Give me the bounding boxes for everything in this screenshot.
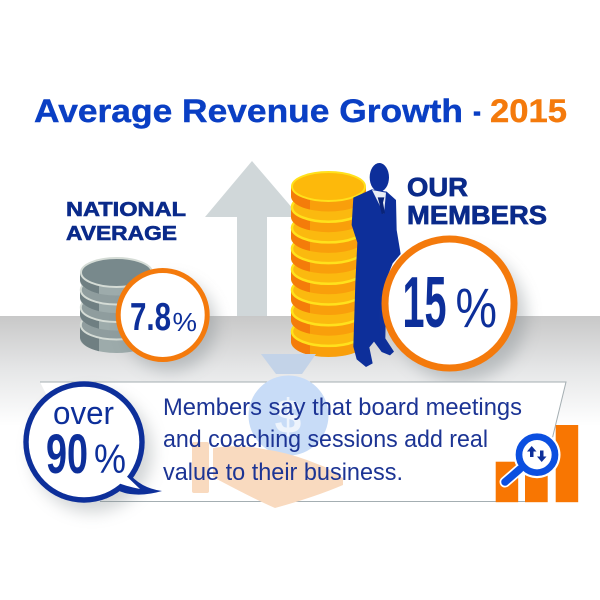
title: 2015: [490, 93, 567, 129]
icon: grey coin stack: [80, 258, 153, 353]
badge: national 7.8%: %: [172, 307, 197, 337]
member statement text: [163, 394, 522, 486]
floor band: [0, 316, 600, 426]
our members label: OUR: [407, 174, 468, 202]
our members label: MEMBERS: [407, 202, 547, 230]
badge: members 15%: 15: [402, 263, 446, 343]
badge: national 7.8%: 7.8: [130, 296, 171, 339]
national average label: NATIONAL: [66, 199, 186, 221]
shadow: national circle: [124, 279, 216, 371]
speech bubble: over 90%: over: [53, 395, 114, 431]
shadow: members circle: [394, 250, 526, 382]
member statement text: Members say that board meetings: [163, 394, 522, 421]
icon: gold coin stack: [291, 172, 366, 357]
speech bubble: over 90%: 90: [46, 422, 88, 485]
icon: money bag in hand: [192, 354, 343, 508]
badge: members 15%: [385, 239, 514, 368]
member statement text: value to their business.: [163, 459, 403, 486]
badge: national 7.8%: [118, 270, 207, 360]
speech bubble: over 90%: %: [94, 436, 126, 482]
bar chart icon: [496, 425, 578, 502]
shadow: speech bubble: [32, 392, 152, 512]
icon: businessman silhouette: [352, 163, 401, 367]
title: Average Revenue Growth: [34, 93, 463, 129]
speech bubble: over 90%: [23, 381, 162, 503]
panel: callout box: [40, 382, 566, 502]
national average label: [66, 199, 186, 245]
title: -: [473, 93, 481, 129]
member statement text: and coaching sessions add real: [163, 426, 488, 453]
badge: members 15%: %: [456, 276, 497, 339]
icon: magnifying glass: [505, 431, 560, 482]
our members label: [407, 174, 547, 230]
growth arrow: [205, 161, 300, 316]
icon: money bag in hand: $: [275, 391, 302, 444]
national average label: AVERAGE: [66, 223, 177, 245]
